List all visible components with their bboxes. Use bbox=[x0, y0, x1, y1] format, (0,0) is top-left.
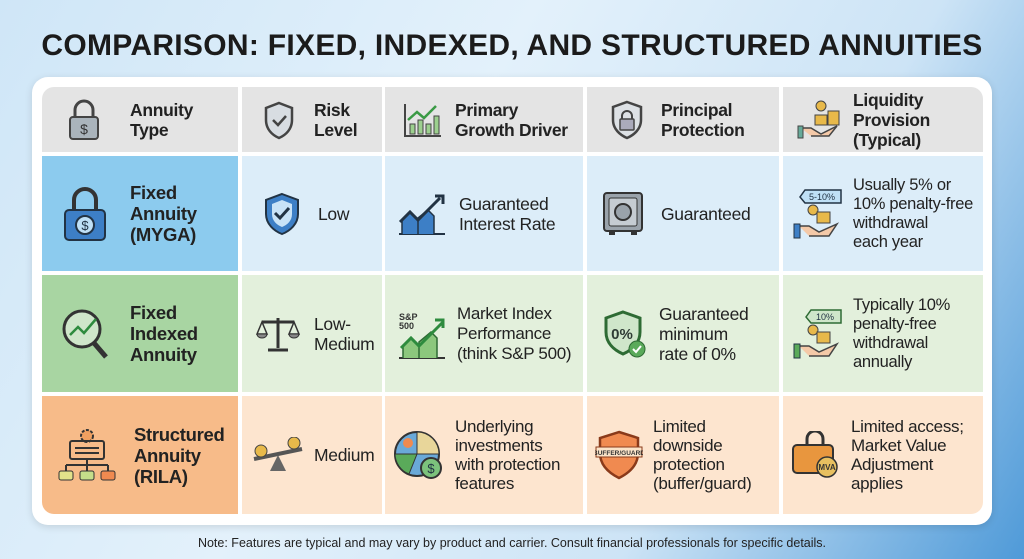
cell: underlying investments bbox=[385, 396, 583, 514]
cell: underlying investments: with protection bbox=[455, 455, 560, 474]
cell: low risk: Low bbox=[318, 204, 349, 224]
cell: fixed annuity type: Annuity bbox=[130, 203, 197, 224]
cell: underlying investments: Underlying bbox=[455, 417, 533, 436]
cell: low-medium bbox=[242, 275, 382, 392]
cell: fixed annuity type: Fixed bbox=[130, 182, 177, 203]
cell: structured type: (RILA) bbox=[134, 466, 188, 486]
header: liquidity bbox=[783, 87, 983, 152]
cell: medium: Medium bbox=[314, 445, 374, 465]
cell: fixed indexed type: Annuity bbox=[130, 344, 197, 365]
cell: liquidity 5-10%: 5-10% bbox=[809, 192, 835, 202]
cell: guaranteed principal bbox=[587, 156, 779, 271]
cell: market index bbox=[385, 275, 583, 392]
cell: liquidity 10%: withdrawal bbox=[853, 334, 928, 352]
cell: 0% minimum: minimum bbox=[659, 324, 728, 344]
cell: underlying investments: features bbox=[455, 474, 514, 493]
cell: MVA: Limited access; bbox=[851, 417, 964, 436]
cell: MVA: Adjustment bbox=[851, 455, 933, 474]
row: structured annuity bbox=[42, 396, 983, 514]
cell: low risk bbox=[242, 156, 382, 271]
footnote: Note: Features are typical and may vary by product and carrier. Consult financial professionals for specific details. bbox=[198, 536, 826, 550]
header: annuity type: Annuity bbox=[130, 100, 193, 120]
cell: fixed annuity type: $ bbox=[81, 218, 89, 232]
header: growth driver: Growth Driver bbox=[455, 120, 568, 140]
header: growth driver: Primary bbox=[455, 100, 518, 120]
cell: guaranteed principal: Guaranteed bbox=[661, 204, 750, 224]
cell: MVA: MVA bbox=[818, 463, 836, 472]
cell: market index: 500 bbox=[399, 320, 414, 330]
title: COMPARISON: FIXED, INDEXED, AND STRUCTURED ANNUITIES bbox=[41, 29, 983, 62]
cell: buffer/guard: (buffer/guard) bbox=[653, 474, 752, 493]
cell: MVA: Market Value bbox=[851, 436, 946, 455]
row: fixed annuity bbox=[42, 156, 983, 271]
cell: structured type: Annuity bbox=[134, 444, 201, 466]
cell: structured type bbox=[42, 396, 238, 514]
cell: underlying investments: investments bbox=[455, 436, 542, 455]
header: risk level: Risk bbox=[314, 100, 350, 120]
header: liquidity: (Typical) bbox=[853, 130, 921, 150]
cell: market index: Market Index bbox=[457, 304, 552, 322]
header: growth driver bbox=[385, 87, 583, 152]
cell: guaranteed interest: Interest Rate bbox=[459, 214, 555, 234]
cell: guaranteed interest bbox=[385, 156, 583, 271]
cell: buffer/guard: protection bbox=[653, 455, 725, 474]
cell: liquidity 5-10%: withdrawal bbox=[853, 214, 928, 232]
cell: underlying investments: $ bbox=[427, 461, 435, 476]
cell: 0% minimum bbox=[587, 275, 779, 392]
cell: fixed annuity type bbox=[42, 156, 238, 271]
cell: fixed indexed type bbox=[42, 275, 238, 392]
row: fixed indexed annuity bbox=[42, 275, 983, 392]
cell: low-medium: Low- bbox=[314, 314, 351, 334]
cell: 0% minimum: Guaranteed bbox=[659, 304, 748, 324]
header: risk level bbox=[242, 87, 382, 152]
cell: 0% minimum: rate of 0% bbox=[659, 344, 736, 364]
cell: liquidity 10%: penalty-free bbox=[853, 314, 937, 332]
cell: liquidity 5-10%: Usually 5% or bbox=[853, 176, 951, 194]
header: risk level: Level bbox=[314, 120, 357, 140]
cell: liquidity 10% bbox=[783, 275, 983, 392]
cell: buffer/guard: Limited bbox=[653, 417, 706, 436]
cell: fixed annuity type: (MYGA) bbox=[130, 224, 196, 245]
cell: market index: S&P bbox=[399, 312, 418, 322]
cell: buffer/guard: downside bbox=[653, 436, 722, 455]
cell: medium bbox=[242, 396, 382, 514]
cell: fixed indexed type: Indexed bbox=[130, 323, 198, 344]
header: annuity type: Type bbox=[130, 120, 168, 140]
cell: buffer/guard bbox=[587, 396, 779, 514]
cell: market index: Performance bbox=[457, 324, 551, 342]
cell: MVA: applies bbox=[851, 474, 903, 493]
panel: comparison table card bbox=[32, 77, 992, 525]
cell: fixed indexed type: Fixed bbox=[130, 302, 177, 323]
cell: liquidity 5-10%: each year bbox=[853, 232, 923, 250]
cell: 0% minimum: 0% bbox=[611, 326, 633, 342]
header: liquidity: Liquidity bbox=[853, 90, 923, 110]
cell: structured type: Structured bbox=[134, 424, 225, 444]
header: annuity type: $ bbox=[80, 120, 88, 136]
header: principal protection bbox=[587, 87, 779, 152]
header: liquidity: Provision bbox=[853, 110, 930, 130]
cell: market index: (think S&P 500) bbox=[457, 344, 571, 362]
cell: guaranteed interest: Guaranteed bbox=[459, 194, 548, 214]
cell: liquidity 5-10%: 10% penalty-free bbox=[853, 194, 973, 212]
cell: liquidity 10%: Typically 10% bbox=[853, 296, 950, 314]
cell: liquidity 5-10% bbox=[783, 156, 983, 271]
cell: low-medium: Medium bbox=[314, 334, 374, 354]
cell: liquidity 10%: annually bbox=[853, 352, 912, 370]
cell: liquidity 10%: 10% bbox=[816, 312, 834, 322]
header: principal protection: Principal bbox=[661, 100, 732, 120]
header: principal protection: Protection bbox=[661, 120, 745, 140]
cell: MVA bbox=[783, 396, 983, 514]
header: annuity type bbox=[42, 87, 238, 152]
